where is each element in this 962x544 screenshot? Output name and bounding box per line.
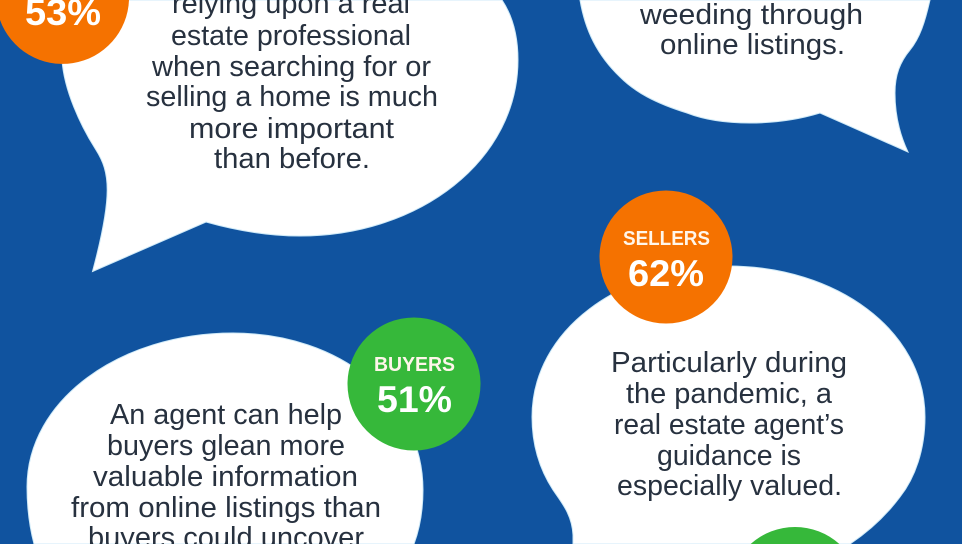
badge: orange 53%: [0, 0, 129, 64]
bubble text: especially valued.: [617, 470, 842, 502]
bubble text: guidance is: [657, 440, 801, 472]
bubble text: An agent can help: [110, 399, 342, 431]
bubble text: online listings.: [660, 29, 845, 61]
panel: lower-right speech bubble: [532, 266, 925, 544]
bubble text: the pandemic, a: [626, 378, 832, 410]
badge: orange sellers 62%: SELLERS: [623, 227, 710, 250]
bubble text: selling a home is much: [146, 81, 438, 113]
bubble shape with tail: [62, 0, 518, 272]
bubble shape with tail: [580, 0, 930, 152]
panel: top-right speech bubble: [580, 0, 930, 152]
bubble text: buyers glean more: [107, 430, 345, 462]
bubble text: [611, 347, 847, 502]
bubble shape: [532, 266, 925, 544]
bubble text: estate professional: [171, 20, 411, 52]
bubble text: valuable information: [93, 461, 358, 493]
bubble text: [639, 0, 863, 61]
badge: orange sellers 62%: [600, 190, 732, 324]
panel: lower-left speech bubble: [27, 333, 423, 544]
bubble text: more important: [189, 113, 394, 145]
bubble text: than before.: [214, 143, 370, 175]
bubble text: [146, 0, 438, 175]
badge: green buyers 51%: 51%: [377, 379, 452, 420]
badge: green buyers 51%: [348, 318, 480, 450]
badge: green, cropped at bottom edge: [751, 527, 839, 544]
bubble shape: [27, 333, 423, 544]
panel: top-left speech bubble: [62, 0, 518, 272]
bubble text: Particularly during: [611, 347, 847, 379]
bubble text: from online listings than: [71, 492, 381, 524]
badge: orange sellers 62%: 62%: [628, 253, 704, 294]
bubble text: when searching for or: [151, 51, 432, 83]
bubble text: [71, 399, 381, 544]
bubble text: real estate agent’s: [614, 409, 844, 441]
badge: green buyers 51%: BUYERS: [374, 353, 455, 376]
